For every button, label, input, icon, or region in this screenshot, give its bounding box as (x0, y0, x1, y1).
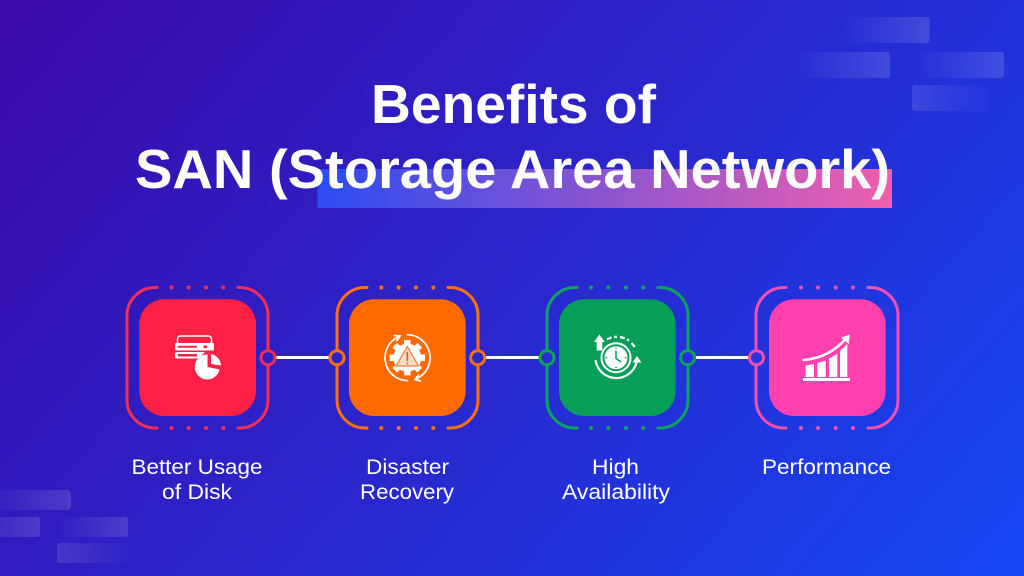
label 1: Better Usage (132, 456, 262, 479)
node 2 left (330, 351, 344, 365)
node 3 left (540, 351, 554, 365)
card frame 2 (337, 288, 478, 428)
icon: server with pie chart (175, 336, 221, 379)
title: SAN (Storage Area Network) (135, 138, 890, 200)
title: Benefits of (371, 73, 657, 135)
card 2 (349, 299, 466, 416)
step 2: Disaster Recovery (330, 286, 485, 504)
frame dots 4 (799, 286, 855, 430)
label 2: Disaster (366, 456, 449, 479)
frame dots 3 (589, 286, 645, 430)
title (135, 73, 890, 200)
card 1 (139, 299, 256, 416)
label 2: Recovery (360, 481, 455, 504)
step 1: Better Usage of Disk (127, 286, 275, 504)
label 3: Availability (562, 481, 671, 504)
label 4: Performance (762, 456, 891, 479)
node 4 left (750, 351, 764, 365)
label 1: of Disk (162, 481, 233, 504)
card frame 4 (756, 288, 898, 428)
icon: bar chart with rising arrow (803, 334, 850, 381)
node 1 right (261, 351, 275, 365)
connector line 3 (695, 356, 750, 359)
decorative bars: bottom left (0, 490, 135, 563)
step 3: High Availability (540, 286, 695, 504)
card frame 3 (547, 288, 688, 428)
card frame 1 (127, 288, 268, 428)
card 4 (769, 299, 886, 416)
node 3 right (681, 351, 695, 365)
frame dots 2 (379, 286, 435, 430)
label 3: High (592, 456, 639, 479)
icon: clock with up arrow (594, 334, 642, 378)
node 2 right (471, 351, 485, 365)
connector line 2 (485, 356, 540, 359)
frame dots 1 (170, 286, 225, 430)
icon: gear with warning triangle and recovery arrows (385, 335, 430, 381)
decorative bars: top right (800, 17, 1004, 111)
connector line 1 (275, 356, 330, 359)
card 3 (559, 299, 676, 416)
step 4: Performance (750, 286, 898, 479)
title highlight bar (318, 169, 892, 208)
